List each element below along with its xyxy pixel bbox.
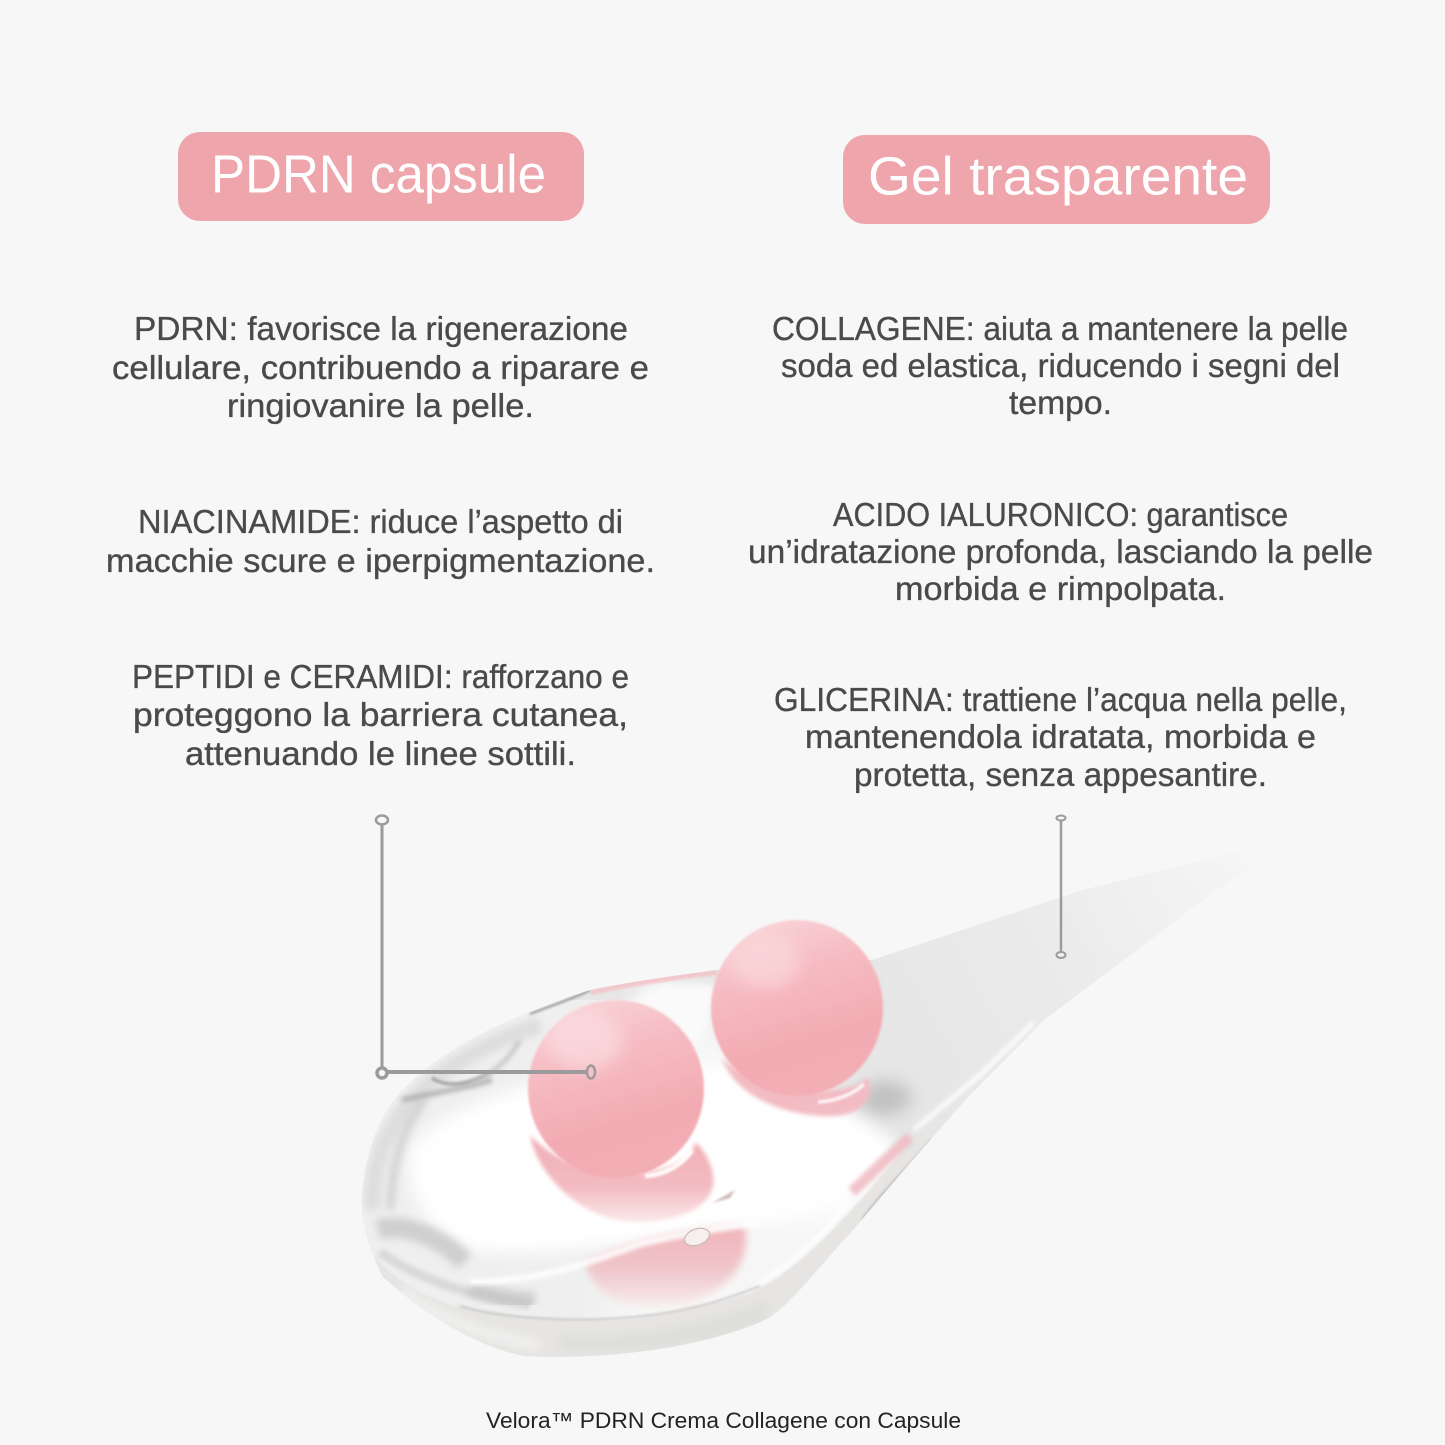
text block: Acido ialuronico: morbida e rimpolpata. xyxy=(895,570,1226,607)
text block: Acido ialuronico: ACIDO IALURONICO: garantisce xyxy=(833,496,1288,533)
white streak xyxy=(470,1222,760,1282)
text block: Niacinamide: macchie scure e iperpigmentazione. xyxy=(106,542,655,579)
water droplet xyxy=(682,1225,712,1249)
text block: Peptidi e Ceramidi: proteggono la barriera cutanea, xyxy=(133,696,628,733)
callout line: PDRN capsule xyxy=(376,816,595,1078)
callout line: Gel trasparente xyxy=(1056,816,1066,958)
capsule: rear xyxy=(711,920,883,1096)
panel: PDRN capsule heading xyxy=(178,132,584,221)
text block: Niacinamide: NIACINAMIDE: riduce l’aspetto di xyxy=(138,503,623,540)
panel: PDRN capsule heading: PDRN capsule xyxy=(211,144,546,204)
text block: Collagene: COLLAGENE: aiuta a mantenere la pelle xyxy=(772,310,1348,347)
text block: Collagene: tempo. xyxy=(1009,384,1112,421)
text block: Peptidi e Ceramidi: attenuando le linee sottili. xyxy=(185,735,576,772)
right edge ribbons xyxy=(914,1022,1034,1130)
text block: Collagene xyxy=(772,310,1348,421)
text block: Glicerina xyxy=(774,681,1347,793)
text block: Glicerina: mantenendola idratata, morbida e xyxy=(805,718,1316,755)
illustration: gel smear with capsules xyxy=(362,884,1142,1357)
wedge shadow beside front collar xyxy=(712,1190,735,1203)
text block: PDRN xyxy=(112,310,649,424)
glass rim streaks xyxy=(372,1025,540,1210)
text block: PDRN: cellulare, contribuendo a riparare e xyxy=(112,349,649,386)
glass base left xyxy=(362,1000,598,1317)
panel: Gel trasparente heading: Gel trasparente xyxy=(868,146,1248,206)
text block: Niacinamide xyxy=(106,503,655,579)
capsule: rear collar highlight xyxy=(818,1084,864,1102)
pink reflection in the gel xyxy=(585,1226,746,1306)
gel body xyxy=(362,884,1142,1357)
shadow right of rear capsule xyxy=(859,1081,911,1115)
upper glass band xyxy=(636,984,713,1015)
capsule: rear collar xyxy=(722,1058,870,1116)
text block: Acido ialuronico: un’idratazione profonda, lasciando la pelle xyxy=(748,533,1373,570)
panel: Gel trasparente heading xyxy=(843,135,1270,224)
cream underside xyxy=(375,1156,902,1356)
footer caption: Velora™ PDRN Crema Collagene con Capsule xyxy=(486,1408,961,1433)
capsule: front collar highlight xyxy=(645,1150,692,1176)
text block: Collagene: soda ed elastica, riducendo i segni del xyxy=(781,347,1340,384)
bright interior pool xyxy=(409,1060,900,1252)
text block: Peptidi e Ceramidi xyxy=(132,658,629,772)
text block: PDRN: ringiovanire la pelle. xyxy=(227,387,534,424)
text block: Glicerina: GLICERINA: trattiene l’acqua nella pelle, xyxy=(774,681,1347,718)
text block: Glicerina: protetta, senza appesantire. xyxy=(854,756,1267,793)
cream darker patch xyxy=(560,1300,770,1352)
text block: Acido ialuronico xyxy=(748,496,1373,607)
capsule: front xyxy=(528,1000,704,1178)
text block: Peptidi e Ceramidi: PEPTIDI e CERAMIDI: rafforzano e xyxy=(132,658,629,695)
capsule: front collar xyxy=(530,1135,713,1222)
text block: PDRN: PDRN: favorisce la rigenerazione xyxy=(134,310,628,347)
